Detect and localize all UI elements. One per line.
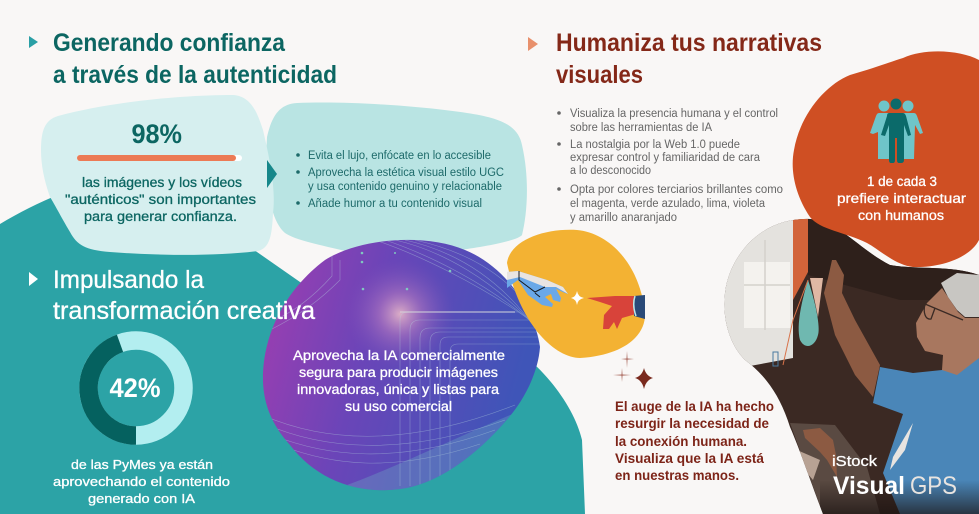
humanize bullet list (557, 108, 783, 224)
heading: creative transformation: Impulsando la (53, 266, 204, 294)
icon: spark between hands (571, 291, 584, 305)
purple blob text: Aprovecha la IA comercialmente (293, 348, 505, 363)
panel: purple AI blob (262, 240, 540, 492)
humanize bullet list: Visualiza la presencia humana y el control (570, 108, 778, 120)
tips bullet list: Evita el lujo, enfócate en lo accesible (308, 150, 491, 162)
logo: iStock Visual GPS: GPS (910, 472, 957, 500)
purple blob text: innovadoras, única y listas para (297, 382, 500, 397)
photo: woman touching interface (720, 215, 979, 514)
humanize bullet list: el magenta, verde azulado, lima, violeta (570, 198, 766, 210)
donut description: aprovechando el contenido (53, 474, 230, 489)
humanize bullet list: y amarillo anaranjado (570, 212, 677, 224)
orange blob text: 1 de cada 3 (867, 174, 937, 189)
heading: humanize: visuales (556, 61, 643, 89)
panel: tips bubble (266, 103, 527, 255)
heading: authenticity: Generando confianza (53, 29, 286, 57)
panel: yellow hands blob (507, 230, 645, 358)
panel: teal creative transformation background (0, 175, 585, 514)
logo: iStock Visual GPS: Visual (833, 472, 905, 500)
conclusion text: resurgir la necesidad de (615, 416, 769, 431)
humanize bullet list: a lo desconocido (570, 165, 651, 177)
stat description: para generar confianza. (84, 209, 237, 224)
tips bullet list (296, 150, 504, 210)
stat description: las imágenes y los vídeos (82, 175, 242, 190)
purple blob text: su uso comercial (345, 399, 452, 414)
logo: iStock Visual GPS (832, 453, 957, 500)
heading: authenticity (29, 29, 337, 89)
stat number 98%: 98% (132, 119, 182, 149)
tips bullet list: Aprovecha la estética visual estilo UGC (308, 167, 504, 179)
arrow between bubbles (267, 160, 277, 188)
humanize bullet list: La nostalgia por la Web 1.0 puede (570, 139, 740, 151)
conclusion text (615, 399, 774, 483)
orange blob text: con humanos (858, 208, 944, 223)
conclusion text: en nuestras manos. (615, 468, 739, 483)
stat description: "auténticos" son importantes (65, 192, 256, 207)
panel: statistic bubble 98% (41, 95, 274, 255)
orange blob text: prefiere interactuar (837, 191, 967, 206)
conclusion text: El auge de la IA ha hecho (615, 399, 774, 414)
tips bullet list: y usa contenido genuino y relacionable (308, 181, 502, 193)
icon: sparkles (613, 351, 653, 389)
icon: three people (870, 98, 923, 163)
stat description (65, 175, 256, 224)
conclusion text: Visualiza que la IA está (615, 451, 764, 466)
panel: orange stat blob (793, 51, 979, 267)
heading: humanize (528, 29, 822, 89)
tips bullet list: Añade humor a tu contenido visual (308, 198, 482, 210)
orange blob text (837, 174, 967, 223)
donut description: de las PyMes ya están (71, 457, 213, 472)
donut description: generado con IA (88, 491, 195, 506)
purple blob text: segura para producir imágenes (299, 365, 498, 380)
humanize bullet list: expresar control y familiaridad de cara (570, 152, 761, 164)
humanize bullet list: sobre las herramientas de IA (570, 122, 712, 134)
donut chart 42% (88, 340, 184, 436)
icon: robot hand (507, 271, 568, 307)
humanize bullet list: Opta por colores terciarios brillantes como (570, 184, 783, 196)
heading fragment overlapping purple blob: transformación creativa (53, 297, 315, 325)
donut description (53, 457, 230, 506)
conclusion text: la conexión humana. (615, 434, 747, 449)
progress bar (77, 155, 242, 161)
logo: iStock Visual GPS: iStock (832, 453, 878, 470)
heading: authenticity: a través de la autenticidad (53, 61, 337, 89)
icon: human hand (587, 295, 645, 329)
heading: humanize: Humaniza tus narrativas (556, 29, 822, 57)
donut value: 42% (110, 373, 160, 403)
purple blob text (293, 348, 505, 414)
